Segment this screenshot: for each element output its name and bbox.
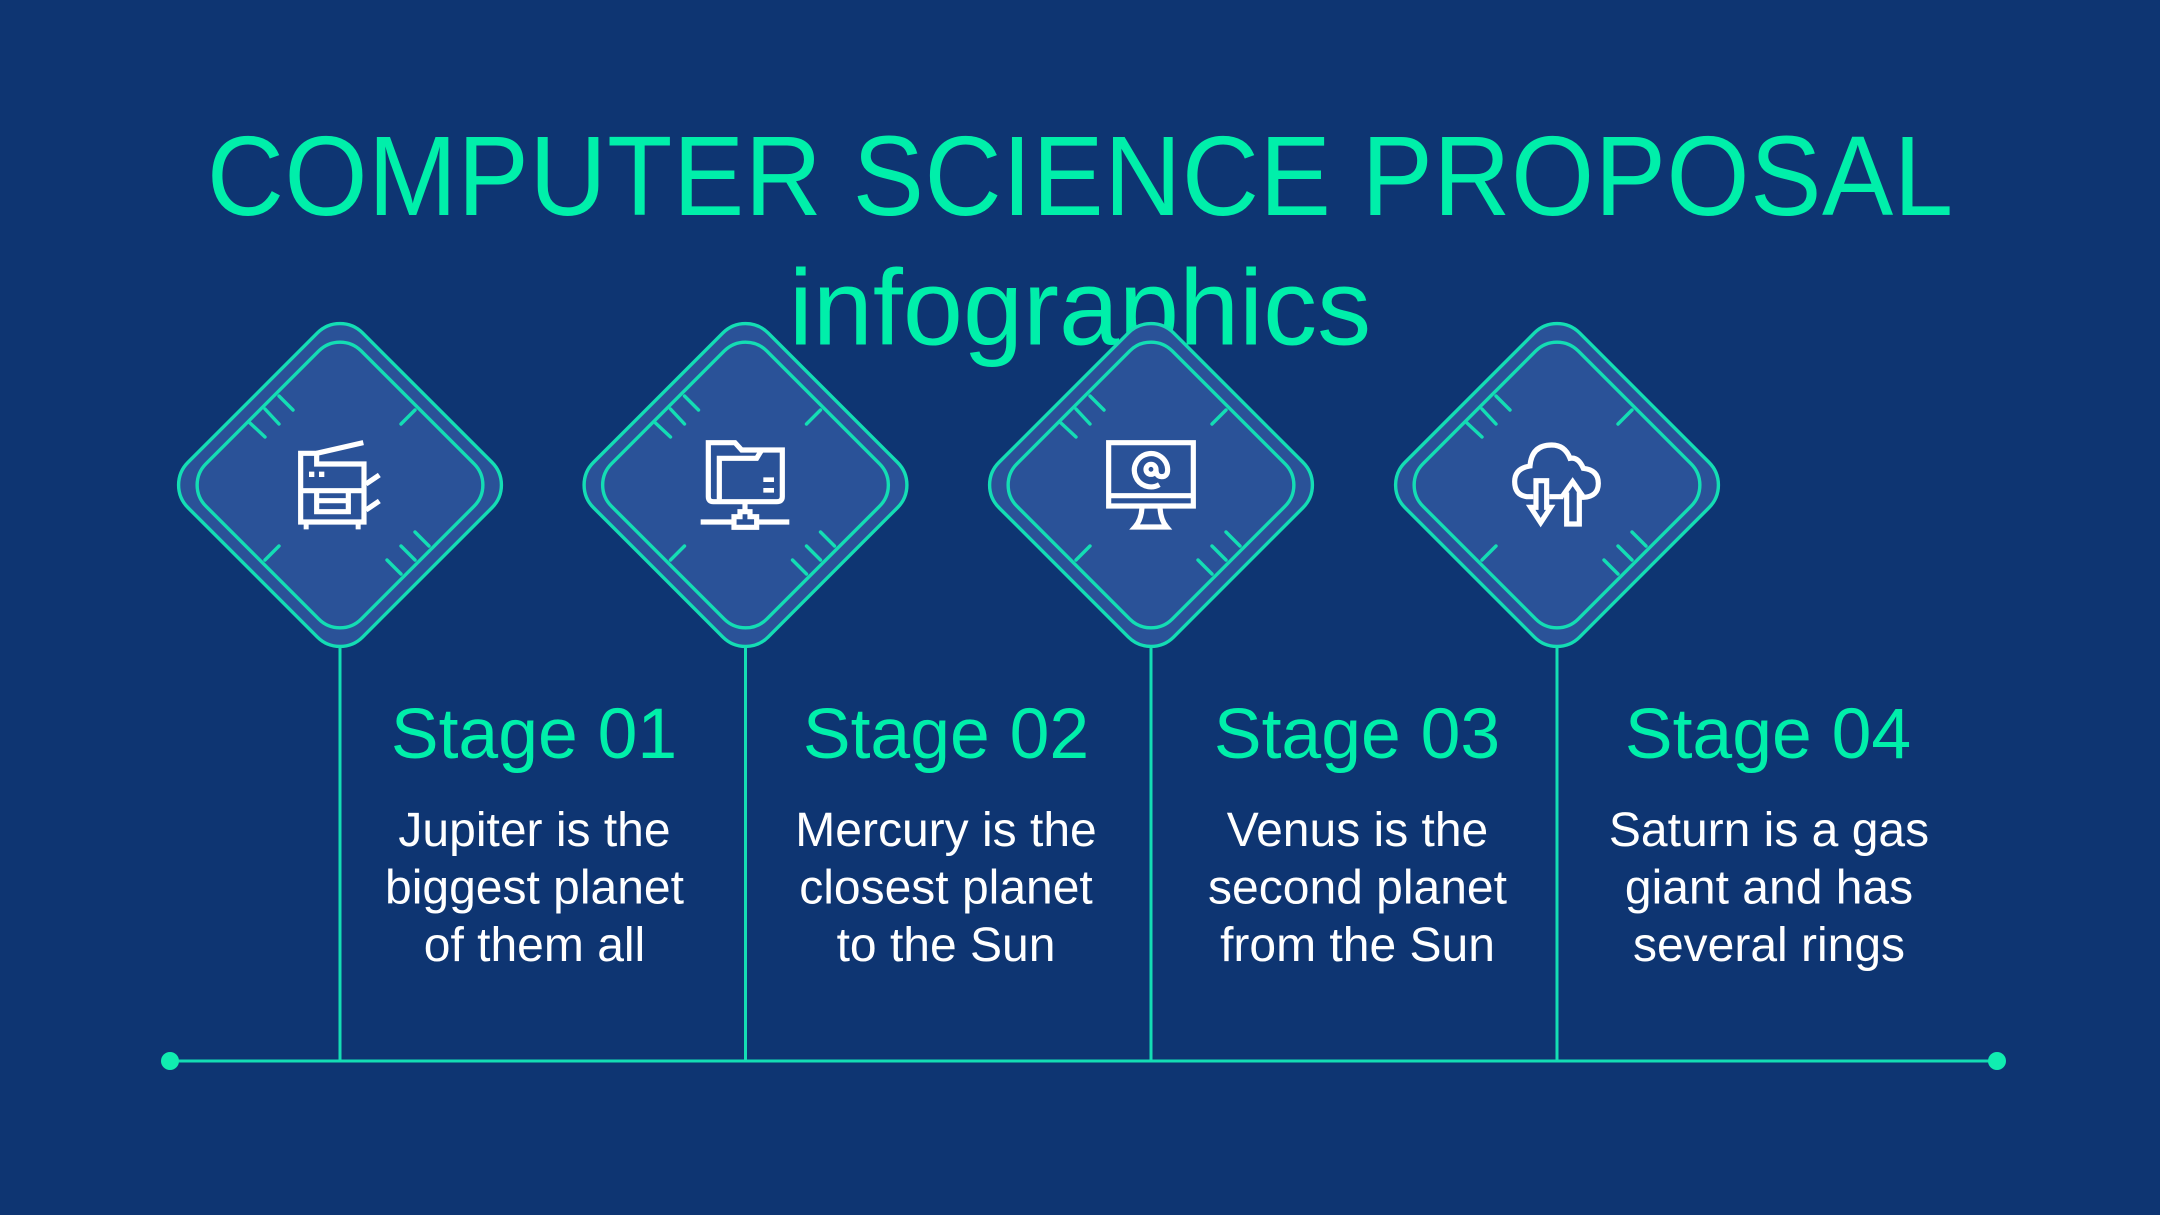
timeline axis — [161, 1052, 2006, 1070]
stage 04 text: several rings — [1633, 919, 1905, 972]
stage 04 connector — [1556, 648, 1558, 1061]
title: infographics — [789, 246, 1371, 368]
stage 02 text: to the Sun — [837, 919, 1055, 972]
stage 02 text: Stage 02 — [803, 694, 1089, 774]
stage 01 text: Jupiter is the — [398, 804, 671, 857]
stage 03 text: Stage 03 — [1214, 694, 1500, 774]
stage 03 text: from the Sun — [1220, 919, 1495, 972]
diamond badge: stage 02 — [571, 310, 920, 660]
stage 04 text: giant and has — [1625, 862, 1913, 914]
stage 03 text — [1208, 694, 1507, 972]
stage 01 text: biggest planet — [385, 862, 684, 914]
icon: cloud upload download — [1515, 445, 1598, 524]
diamond badge: stage 04 — [1382, 310, 1732, 660]
stage 03 connector — [1150, 648, 1152, 1061]
stage 01 text — [385, 694, 684, 972]
stage 04 text — [1609, 694, 1929, 972]
stage 03 text: second planet — [1208, 862, 1507, 914]
icon: photocopier — [301, 443, 379, 529]
stage 02 text: closest planet — [799, 862, 1093, 914]
stage 01 text: Stage 01 — [391, 694, 677, 774]
stage 01 text: of them all — [424, 919, 645, 972]
icon: network folder — [701, 443, 789, 527]
title: COMPUTER SCIENCE PROPOSAL — [207, 113, 1953, 240]
stage 02 connector — [744, 648, 747, 1061]
title — [207, 113, 1953, 368]
diamond badge: stage 03 — [976, 310, 1326, 660]
stage 04 text: Stage 04 — [1625, 694, 1911, 774]
stage 01 connector — [338, 648, 342, 1061]
stage 02 text: Mercury is the — [795, 804, 1097, 857]
icon: monitor with at sign — [1109, 443, 1193, 527]
stage 04 text: Saturn is a gas — [1609, 804, 1929, 857]
diamond badge: stage 01 — [165, 310, 515, 660]
stage 02 text — [795, 694, 1097, 972]
stage 03 text: Venus is the — [1227, 804, 1488, 857]
